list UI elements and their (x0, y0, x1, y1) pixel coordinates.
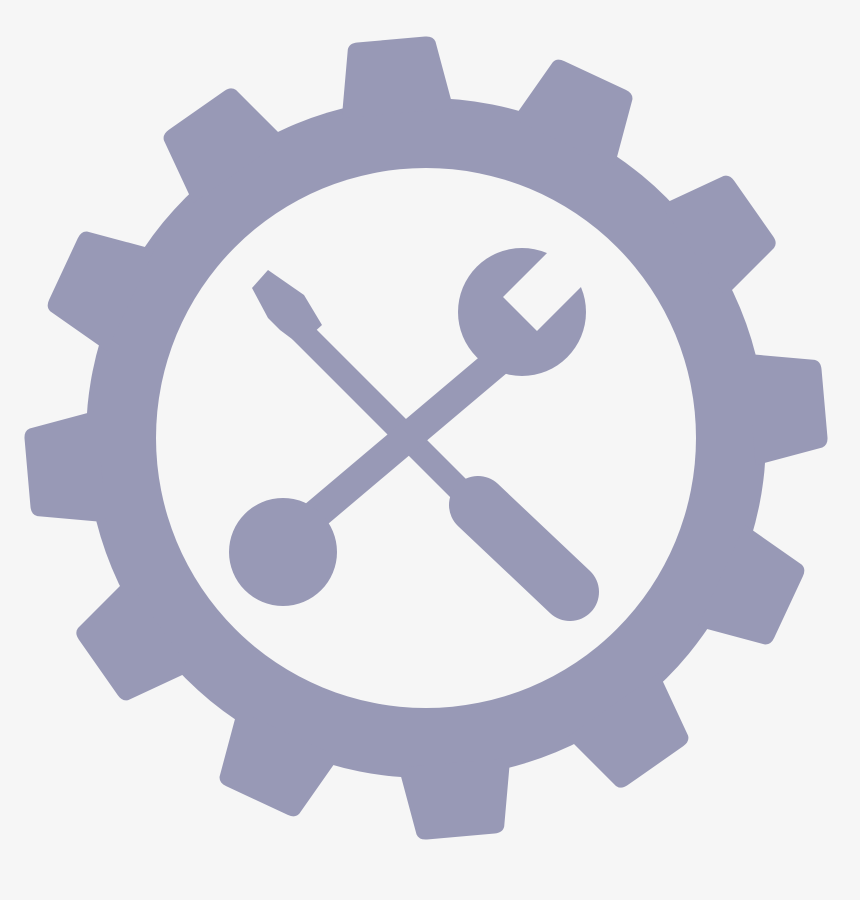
icon: screwdriver (252, 270, 570, 592)
icon: wrench (229, 248, 586, 606)
